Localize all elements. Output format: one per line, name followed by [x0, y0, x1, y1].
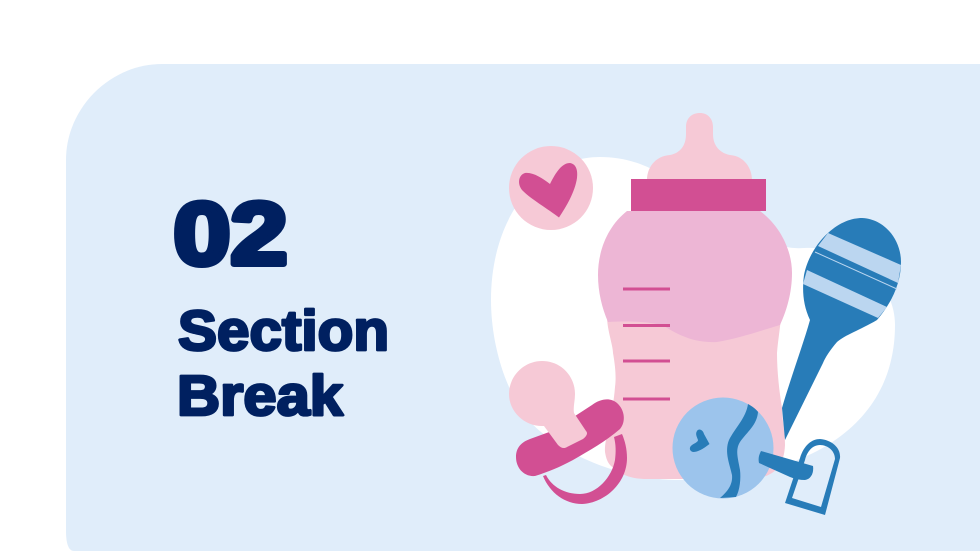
section title: Section	[178, 299, 389, 363]
section title: Break	[177, 364, 343, 428]
section number: 02	[174, 184, 288, 283]
bottle upper body	[598, 211, 792, 342]
bottle lower body with milk	[605, 316, 785, 479]
illustration: baby items	[491, 113, 901, 515]
rattle ball	[672, 398, 774, 498]
pacifier nipple	[509, 361, 587, 448]
section title	[177, 299, 389, 428]
measurement ticks	[623, 288, 670, 400]
pacifier	[509, 361, 627, 504]
rattle handle loop	[785, 439, 840, 515]
pacifier ring	[543, 434, 627, 504]
pacifier shield	[516, 399, 624, 476]
bottle collar	[631, 179, 766, 211]
rattle wave stripe	[720, 404, 758, 498]
rattle	[672, 398, 840, 515]
baby bottle	[598, 113, 792, 479]
maraca head and handle	[782, 218, 901, 440]
bottle teat	[647, 113, 752, 180]
maraca stripes	[818, 233, 901, 283]
rattle heart	[690, 430, 710, 452]
white background blob	[491, 157, 895, 480]
maraca	[782, 218, 901, 440]
rattle handle bar	[759, 451, 813, 480]
icon: heart badge	[509, 146, 593, 230]
